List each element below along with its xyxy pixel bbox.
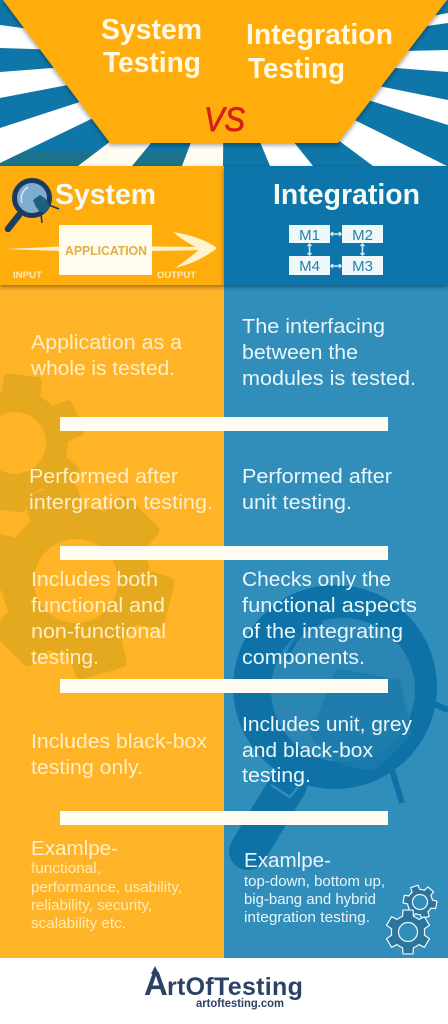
integration row 3: functional aspects xyxy=(242,595,417,617)
system row 3: Includes both xyxy=(31,569,158,591)
system row 3 xyxy=(31,569,166,669)
integration row 3: Checks only the xyxy=(242,569,391,591)
background magnifier xyxy=(233,585,448,851)
integration row 3: of the integrating xyxy=(242,621,403,643)
heading: system: System xyxy=(55,179,156,211)
integration example xyxy=(244,850,385,926)
logo url: artoftesting.com xyxy=(196,998,284,1010)
integration row 2: Performed after xyxy=(242,466,392,488)
system row 2 xyxy=(29,466,213,514)
integration row 4: Includes unit, grey xyxy=(242,714,412,736)
integration example: top-down, bottom up, xyxy=(244,873,385,890)
module diagram xyxy=(289,225,383,275)
integration row 2 xyxy=(242,466,392,514)
title: system testing: Testing xyxy=(103,47,201,79)
background gears xyxy=(0,354,185,689)
integration row 1: between the xyxy=(242,342,358,364)
integration row 3: components. xyxy=(242,647,365,669)
system row 2: Performed after xyxy=(29,466,178,488)
sunburst background xyxy=(0,0,448,166)
title: system testing xyxy=(101,14,202,79)
integration row 4: and black-box xyxy=(242,740,373,762)
system row 1: Application as a xyxy=(31,332,183,354)
system row 2: intergration testing. xyxy=(29,492,213,514)
integration row 1 xyxy=(242,316,416,390)
title: system testing: System xyxy=(101,14,202,46)
box: application xyxy=(59,225,152,275)
system row 4 xyxy=(31,731,207,779)
arrow: input to output xyxy=(5,232,217,268)
panel: integration column xyxy=(224,285,448,958)
system example: functional, xyxy=(31,860,101,877)
box: application: APPLICATION xyxy=(65,244,147,258)
logo wordmark: A xyxy=(144,965,168,1002)
integration row 2: unit testing. xyxy=(242,492,352,514)
logo wordmark: rtOfTesting xyxy=(167,973,303,1001)
integration row 4 xyxy=(242,714,412,787)
integration example: Examlpe- xyxy=(244,850,331,872)
system row 4: Includes black-box xyxy=(31,731,207,753)
system row 3: non-functional xyxy=(31,621,166,643)
system row 4: testing only. xyxy=(31,757,143,779)
title: integration testing xyxy=(246,19,393,85)
system row 3: testing. xyxy=(31,647,99,669)
icon: cogs xyxy=(378,883,439,962)
heading: integration: Integration xyxy=(273,179,420,211)
title: integration testing: Integration xyxy=(246,19,393,51)
integration example: integration testing. xyxy=(244,909,370,926)
label: input: INPUT xyxy=(13,270,43,280)
panel: integration header xyxy=(224,166,448,285)
system row 1: whole is tested. xyxy=(30,358,175,380)
dividers xyxy=(60,417,388,825)
system row 1 xyxy=(30,332,183,380)
integration row 3 xyxy=(242,569,417,669)
integration row 1: modules is tested. xyxy=(242,368,416,390)
top banner xyxy=(3,0,447,143)
system example: performance, usability, xyxy=(31,879,182,896)
panel: system header xyxy=(0,166,224,285)
system example xyxy=(31,838,182,932)
icon: magnifier xyxy=(8,180,59,229)
system row 3: functional and xyxy=(31,595,165,617)
label: output: OUTPUT xyxy=(157,270,197,280)
system example: scalability etc. xyxy=(31,915,126,932)
system example: Examlpe- xyxy=(31,838,118,860)
title: integration testing: Testing xyxy=(248,53,345,85)
module diagram: M3 xyxy=(352,258,373,275)
logo compass mark xyxy=(151,966,159,974)
integration example: big-bang and hybrid xyxy=(244,891,376,908)
module diagram: M2 xyxy=(352,227,373,244)
system example: reliability, security, xyxy=(31,897,152,914)
logo xyxy=(144,965,303,1010)
module diagram: M4 xyxy=(299,258,320,275)
panel: system column xyxy=(0,285,224,958)
integration row 1: The interfacing xyxy=(242,316,385,338)
module diagram: M1 xyxy=(299,227,320,244)
integration row 4: testing. xyxy=(242,765,311,787)
vs label: VS xyxy=(204,101,245,139)
